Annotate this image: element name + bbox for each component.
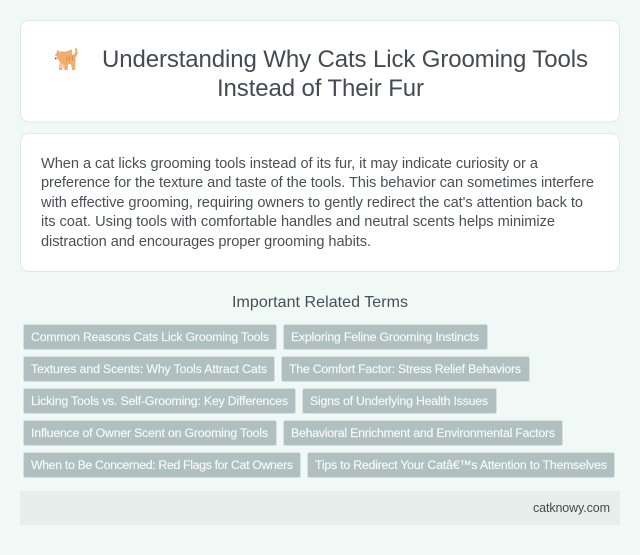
chip: redirect tips: Tips to Redirect Your Catâ€™s Attention to Themselves xyxy=(315,458,607,472)
chip: owner scent xyxy=(24,420,276,446)
chip: licking vs self-grooming xyxy=(24,388,296,414)
text block: description: distraction and encourages proper grooming habits. xyxy=(41,234,371,250)
title: Understanding Why Cats Lick Grooming Tools xyxy=(102,46,588,73)
panel: related term chips xyxy=(24,324,614,478)
chip: common reasons: Common Reasons Cats Lick Grooming Tools xyxy=(31,330,269,344)
chip: health issues xyxy=(302,388,496,414)
chip: textures and scents: Textures and Scents: Why Tools Attract Cats xyxy=(31,362,267,376)
text block: description: When a cat licks grooming tools instead of its fur, it may indicate curiosity or a xyxy=(41,156,539,172)
text block: description: preference for the texture and taste of the tools. This behavior can sometimes interfere xyxy=(41,175,594,191)
chip: health issues: Signs of Underlying Health Issues xyxy=(310,394,488,408)
icon: cat xyxy=(55,48,78,70)
footer xyxy=(20,491,620,525)
chip: comfort factor xyxy=(282,356,530,382)
chip: redirect tips xyxy=(308,452,614,478)
title: Instead of Their Fur xyxy=(217,75,424,102)
text block: description: with effective grooming, requiring owners to gently redirect the cat's attention back to xyxy=(40,195,583,211)
chip: enrichment: Behavioral Enrichment and Environmental Factors xyxy=(291,426,555,440)
chip: exploring instincts: Exploring Feline Grooming Instincts xyxy=(291,330,479,344)
chip: comfort factor: The Comfort Factor: Stress Relief Behaviors xyxy=(289,362,521,376)
chip: common reasons xyxy=(24,324,276,350)
chip: enrichment xyxy=(284,420,562,446)
title xyxy=(102,46,588,102)
chip: licking vs self-grooming: Licking Tools vs. Self-Grooming: Key Differences xyxy=(31,394,288,408)
chip: owner scent: Influence of Owner Scent on Grooming Tools xyxy=(31,426,268,440)
chip: textures and scents xyxy=(24,356,274,382)
panel: description card xyxy=(20,134,620,272)
chip: red flags xyxy=(24,452,300,478)
text block: description xyxy=(40,156,594,250)
chip: exploring instincts xyxy=(284,324,488,350)
text block: description: its coat. Using tools with comfortable handles and neutral scents helps minimize xyxy=(41,214,555,230)
footer: catknowy.com xyxy=(533,501,610,515)
heading: related terms: Important Related Terms xyxy=(232,294,408,311)
panel: title card xyxy=(20,20,620,122)
chip: red flags: When to Be Concerned: Red Flags for Cat Owners xyxy=(31,458,293,472)
